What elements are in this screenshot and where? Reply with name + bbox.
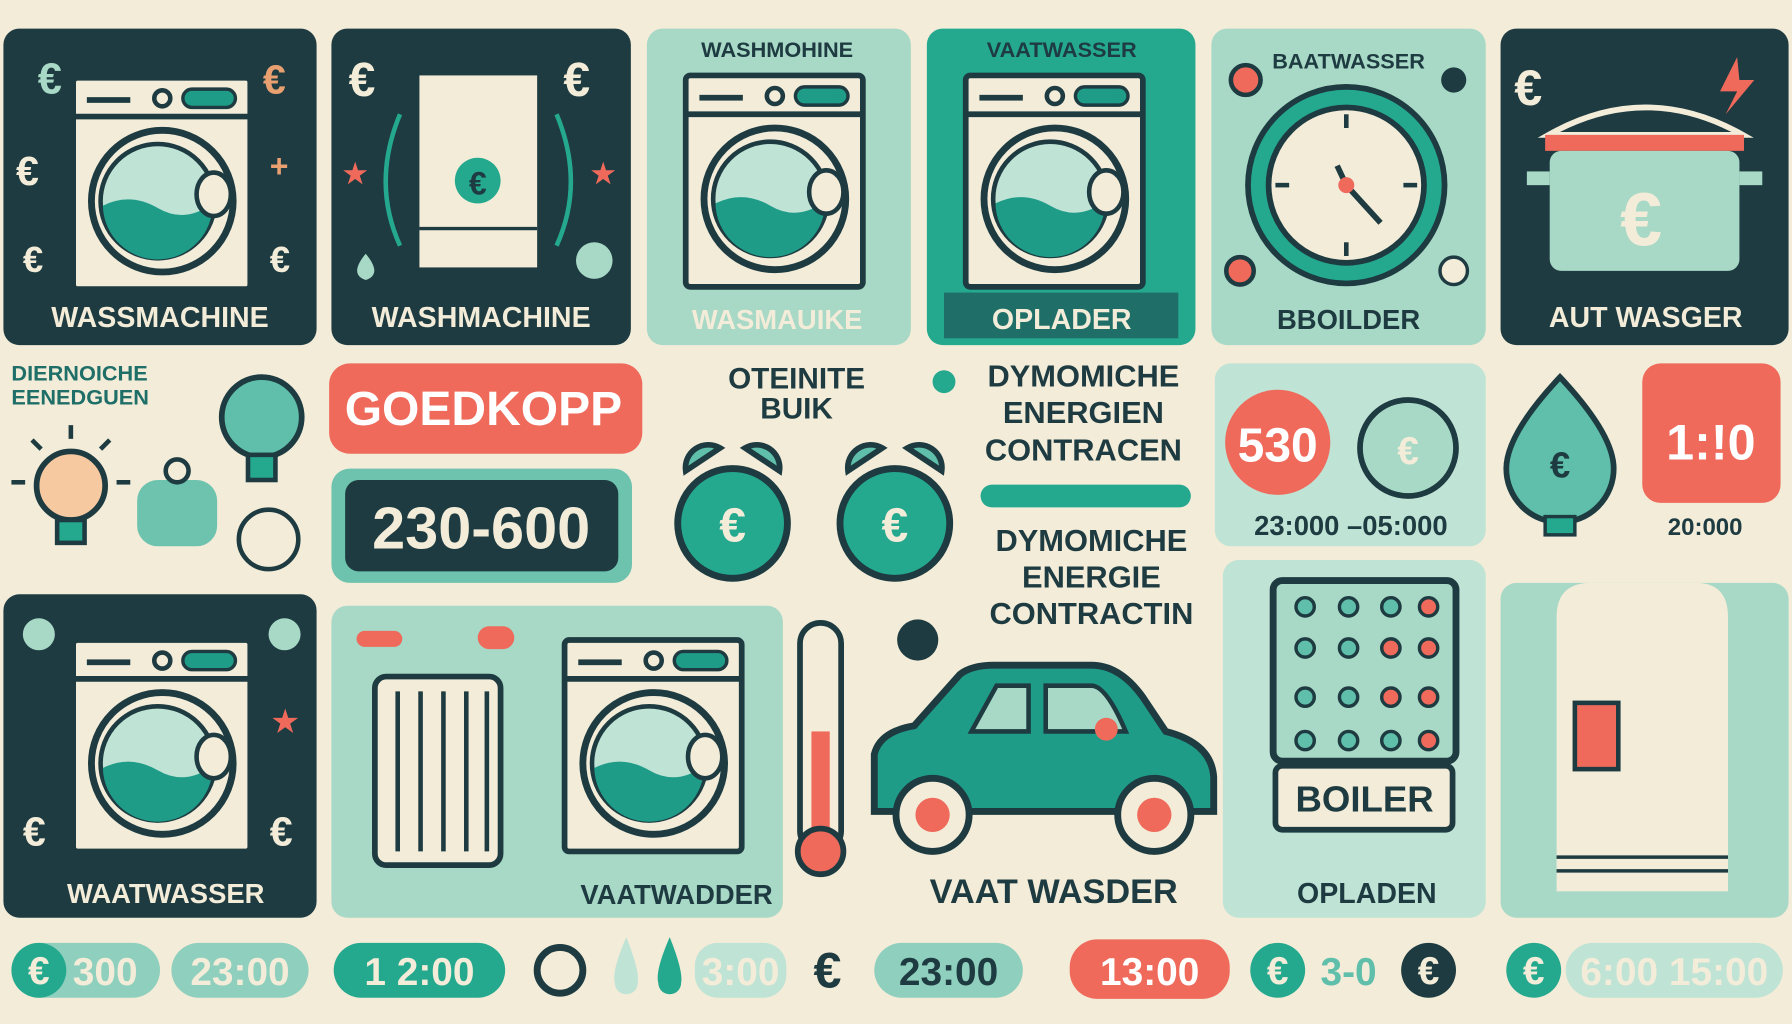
- panel: top washer 2: €: [469, 165, 487, 201]
- panel: top washer 3: WASHMOHINE: [701, 37, 853, 62]
- bottom row: time pills: [11, 937, 1783, 999]
- panel: boiler: BOILER: [1296, 778, 1434, 819]
- callout: 1:!0: 1:!0: [1666, 413, 1756, 470]
- bottom row: time pills: €: [28, 950, 50, 993]
- text: dierenoiche: EENEDGUEN: [11, 385, 149, 410]
- panel: clock: BAATWASSER: [1272, 49, 1425, 74]
- panel: top washer 3: [647, 29, 911, 345]
- panel: top washer 1: €: [270, 239, 290, 280]
- panel: 530 clock: 23:000 –05:000: [1254, 510, 1448, 541]
- panel: bottom washer: €: [23, 809, 46, 855]
- bottom row: time pills: €: [813, 941, 841, 998]
- icon: alarm clocks: €: [882, 500, 908, 553]
- panel: pot: AUT WASGER: [1549, 302, 1743, 334]
- text: dynamische energie contracten 1: ENERGIEN: [1003, 395, 1164, 430]
- text: oteinite buik: OTEINITE: [728, 363, 865, 396]
- panel: top washer 4: OPLADER: [992, 304, 1132, 336]
- text: oteinite buik: BUIK: [760, 392, 833, 425]
- panel: 530 clock: [1215, 363, 1486, 546]
- panel: pot: €: [1514, 59, 1542, 116]
- bottom row: time pills: 13:00: [1100, 951, 1199, 994]
- text: dynamische energie contracten 2: [989, 523, 1193, 631]
- icon: drop: [1506, 377, 1614, 535]
- panel: top washer 1: €: [16, 148, 39, 194]
- panel: radiator and washer: VAATWADDER: [580, 879, 773, 910]
- panel: top washer 4: [927, 29, 1195, 345]
- panel: top washer 3: WASMAUIKE: [692, 304, 862, 335]
- panel: 530 clock: 530: [1238, 420, 1318, 473]
- panel: top washer 2: WASHMACHINE: [372, 302, 591, 334]
- panel: 530 clock: €: [1397, 430, 1419, 473]
- text: oteinite buik: [728, 363, 865, 425]
- text: dynamische energie contracten 1: [933, 358, 1182, 468]
- panel: top washer 2: €: [563, 54, 590, 107]
- icon: drop: €: [1550, 445, 1570, 486]
- callout: goedkopp: GOEDKOPP: [345, 383, 622, 436]
- panel: clock: BBOILDER: [1277, 304, 1420, 335]
- panel: pot: €: [1620, 178, 1662, 262]
- callout: 230-600: 230-600: [372, 495, 590, 562]
- bottom row: time pills: 300: [73, 951, 138, 994]
- callout: 230-600: [331, 469, 632, 583]
- icon: alarm clocks: €: [719, 500, 746, 553]
- panel: bottom washer: [3, 594, 317, 918]
- bottom row: time pills: €: [1267, 950, 1289, 993]
- panel: top washer 2: ★: [343, 158, 367, 189]
- icon: bulbs: [11, 377, 302, 569]
- text: dynamische energie contracten 2: ENERGIE: [1022, 559, 1161, 594]
- panel: top washer 1: WASSMACHINE: [51, 302, 269, 334]
- panel: top washer 2: ★: [591, 158, 615, 189]
- panel: bottom washer: WAATWASSER: [67, 878, 265, 909]
- panel: radiator and washer: [331, 606, 783, 918]
- text: dynamische energie contracten 2: CONTRACTIN: [989, 596, 1193, 631]
- text: dierenoiche: DIERNOICHE: [11, 361, 148, 386]
- icon: car: [874, 619, 1214, 911]
- panel: bottom washer: €: [270, 809, 293, 855]
- panel: top washer 1: €: [263, 57, 286, 103]
- panel: top washer 2: [331, 29, 631, 345]
- panel: top washer 1: €: [38, 56, 62, 104]
- panel: bottom washer: ★: [272, 705, 299, 738]
- panel: top washer 4: VAATWASSER: [987, 37, 1137, 62]
- panel: clock: [1211, 29, 1486, 345]
- bottom row: time pills: 3:00: [702, 951, 779, 994]
- icon: thermometer: [798, 623, 843, 874]
- bottom row: time pills: 6:00 15:00: [1580, 951, 1768, 994]
- text: dynamische energie contracten 2: DYMOMICHE: [995, 523, 1187, 558]
- panel: top washer 1: €: [23, 239, 43, 280]
- callout: 1:!0: 20:000: [1668, 514, 1743, 541]
- panel: pot: [1501, 29, 1789, 345]
- callout: goedkopp: [329, 363, 642, 454]
- panel: fridge: [1501, 583, 1789, 918]
- bottom row: time pills: 23:00: [190, 951, 290, 994]
- icon: alarm clocks: [678, 445, 950, 578]
- text: dynamische energie contracten 1: DYMOMICHE: [987, 358, 1179, 393]
- panel: boiler: [1223, 560, 1486, 918]
- bottom row: time pills: 1 2:00: [364, 951, 474, 994]
- icon: car: VAAT WASDER: [930, 873, 1178, 911]
- bottom row: time pills: €: [1523, 950, 1545, 993]
- panel: top washer 2: €: [349, 54, 375, 107]
- text: dierenoiche: [11, 361, 149, 410]
- callout: 1:!0: [1642, 363, 1781, 541]
- bottom row: time pills: €: [1418, 950, 1439, 993]
- text: dynamische energie contracten 1: CONTRACEN: [985, 433, 1182, 468]
- panel: top washer 1: [3, 29, 317, 345]
- bottom row: time pills: 23:00: [899, 951, 998, 994]
- panel: top washer 1: +: [270, 148, 288, 184]
- panel: boiler: OPLADEN: [1297, 878, 1437, 910]
- bottom row: time pills: 3-0: [1320, 951, 1377, 994]
